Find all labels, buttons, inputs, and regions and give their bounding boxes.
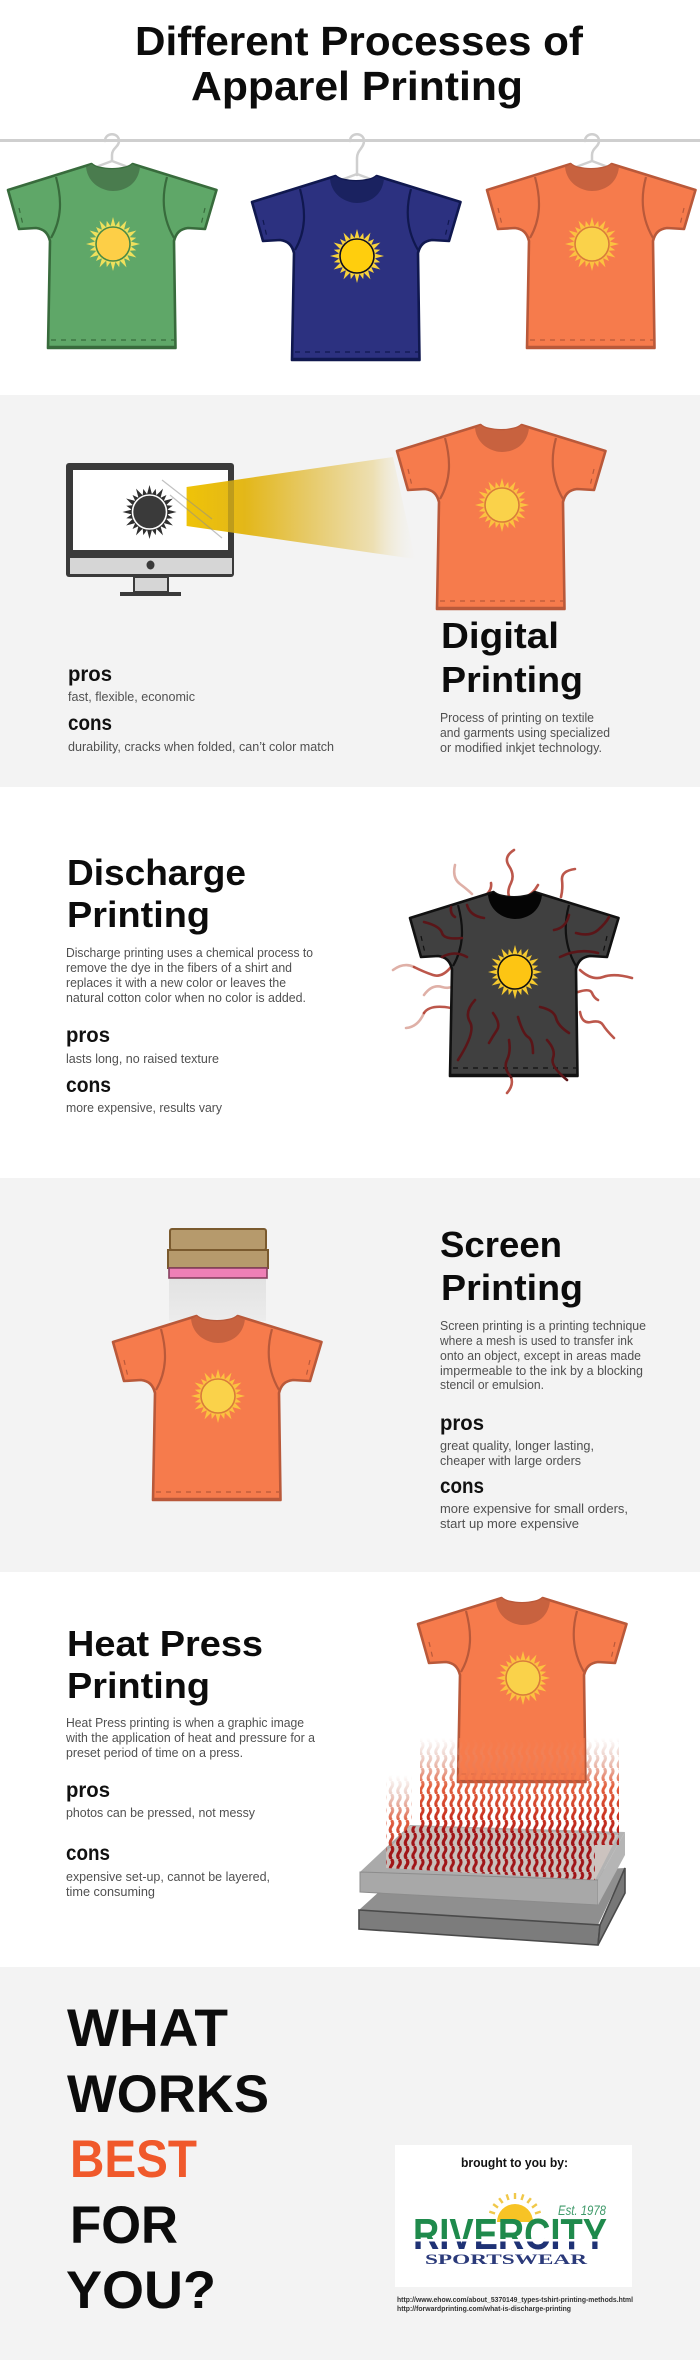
pros: pros [440,1412,484,1435]
closing question: WHAT [67,1999,228,2058]
logo: River City Sportswear [413,2193,607,2268]
sponsor card: brought to you by: [461,2155,568,2170]
cons: start up more expensive [440,1516,579,1531]
heading: discharge printing: Printing [67,894,210,935]
logo: River City Sportswear: RIVERCITY [413,2210,607,2259]
description: stencil or emulsion. [440,1377,544,1392]
pros [66,1024,219,1066]
pros: pros [66,1779,110,1802]
description: remove the dye in the fibers of a shirt and [66,960,292,975]
panel: discharge printing [66,850,632,1115]
description: impermeable to the ink by a blocking [440,1363,643,1378]
panel: closing call to action [0,1967,700,2360]
cons [440,1475,628,1531]
panel: screen printing [0,1178,700,1572]
description [439,1318,646,1392]
title: Apparel Printing [191,63,523,109]
heading: heat press printing: Printing [67,1665,210,1706]
pros [66,1779,255,1820]
heading: discharge printing: Discharge [67,852,246,893]
pros [440,1412,594,1468]
description [440,710,610,755]
icon: navy shirt on hanger [252,134,460,360]
cons: cons [66,1074,111,1097]
heading: screen printing: Screen [440,1224,562,1265]
closing question: YOU? [66,2261,216,2320]
description: Process of printing on textile [440,710,594,725]
closing question: WORKS [67,2065,269,2124]
logo: River City Sportswear: SPORTSWEAR [425,2252,587,2268]
description: preset period of time on a press. [66,1745,243,1760]
icon: orange shirt [113,1316,322,1500]
panel: heat press printing [65,1598,626,1945]
description: replaces it with a new color or leaves the [66,975,286,990]
cons: more expensive for small orders, [440,1501,628,1516]
logo: River City Sportswear: Est. 1978 [558,2202,606,2218]
cons: cons [66,1842,110,1865]
closing question [66,1999,269,2320]
cons: cons [68,712,112,735]
icon: squeegee [168,1229,268,1278]
pros: pros [66,1024,110,1047]
description: onto an object, except in areas made [440,1348,641,1363]
heading: discharge printing [67,852,246,935]
pros: cheaper with large orders [440,1453,581,1468]
pros: photos can be pressed, not messy [66,1805,255,1820]
description: with the application of heat and pressure for a [65,1730,316,1745]
panel: three hanging shirts [8,134,696,360]
cons [66,1074,222,1115]
closing question: BEST [70,2130,197,2189]
heading: digital printing: Digital [441,615,559,656]
source links [397,2295,633,2313]
icon: computer monitor [66,463,234,596]
description: where a mesh is used to transfer ink [439,1333,633,1348]
icon: orange shirt [397,425,606,609]
description: Heat Press printing is when a graphic image [66,1715,304,1730]
title: Different Processes of [135,18,583,64]
description: or modified inkjet technology. [440,740,602,755]
cons: cons [440,1475,484,1498]
cons: expensive set-up, cannot be layered, [66,1869,270,1884]
source links: http://forwardprinting.com/what-is-discharge-printing [397,2304,571,2313]
heading: heat press printing [67,1623,263,1706]
heading: digital printing: Printing [441,659,583,700]
cons: durability, cracks when folded, can’t color match [68,739,334,754]
icon: orange shirt on hanger [487,134,696,348]
source links: http://www.ehow.com/about_5370149_types-tshirt-printing-methods.html [397,2295,633,2304]
sponsor card [395,2145,632,2287]
pros: lasts long, no raised texture [66,1051,219,1066]
icon: heat press with shirt and heat waves [359,1598,626,1945]
pros [68,663,195,704]
title [135,18,583,109]
icon: green shirt on hanger [8,134,216,348]
heading: digital printing [441,615,583,700]
ink shadow under squeegee [169,1279,266,1321]
description: natural cotton color when no color is added. [66,990,306,1005]
heading: screen printing: Printing [441,1267,583,1308]
description: Screen printing is a printing technique [440,1318,646,1333]
heading: heat press printing: Heat Press [67,1623,263,1664]
heading: screen printing [440,1224,583,1308]
pros: fast, flexible, economic [68,689,195,704]
description [66,945,313,1005]
icon: dark shirt with chemical squiggles [393,850,632,1093]
pros: pros [68,663,112,686]
cons [68,712,334,754]
projected light beam [162,457,415,559]
cons: time consuming [66,1884,155,1899]
clothesline [0,139,700,142]
pros: great quality, longer lasting, [440,1438,594,1453]
description [65,1715,316,1760]
cons: more expensive, results vary [66,1100,222,1115]
description: and garments using specialized [440,725,610,740]
cons [66,1842,270,1899]
panel: digital printing [0,395,700,787]
description: Discharge printing uses a chemical process to [66,945,313,960]
closing question: FOR [70,2196,178,2255]
